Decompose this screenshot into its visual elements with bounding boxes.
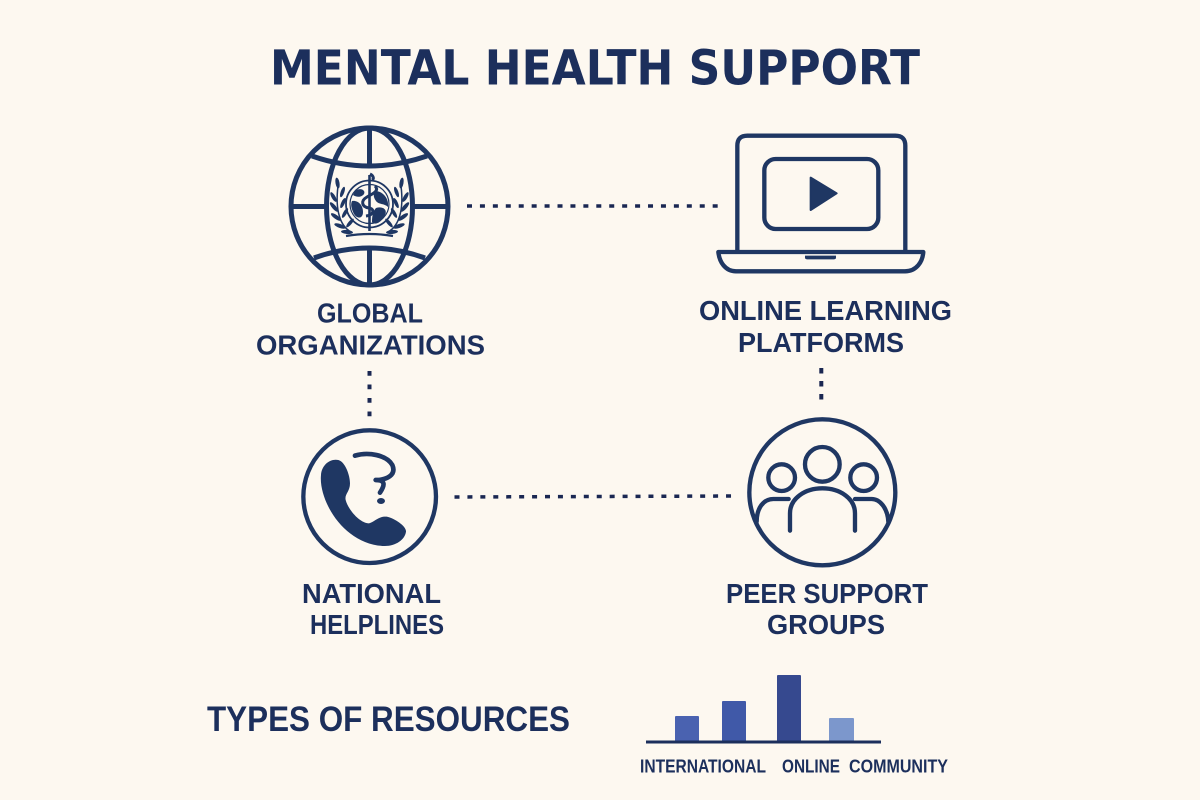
label: online learning platforms — [699, 295, 952, 358]
label: peer support groups: GROUPS — [767, 609, 885, 640]
connector: online to peer — [819, 368, 823, 401]
label: peer support groups — [726, 578, 928, 640]
laurel right — [384, 177, 410, 235]
heading: types of resources: TYPES OF RESOURCES — [207, 700, 570, 739]
label: global organizations: GLOBAL — [317, 298, 423, 328]
bar: fourth — [829, 718, 854, 742]
label: global organizations: ORGANIZATIONS — [256, 330, 485, 360]
label: online learning platforms: PLATFORMS — [738, 327, 904, 358]
label: national helplines: NATIONAL — [302, 578, 441, 609]
chart label: online: ONLINE — [782, 756, 840, 776]
bar: third — [777, 675, 801, 742]
label: national helplines — [302, 578, 444, 640]
connector: helplines to peer — [454, 496, 732, 497]
icon: peer support group — [749, 419, 895, 565]
label: online learning platforms: ONLINE LEARNING — [699, 295, 952, 326]
bar chart — [640, 675, 948, 776]
chart label: community: COMMUNITY — [849, 756, 948, 776]
label: national helplines: HELPLINES — [310, 609, 444, 640]
bar: second — [722, 701, 746, 742]
icon: phone with question mark — [303, 430, 436, 563]
label: peer support groups: PEER SUPPORT — [726, 578, 928, 609]
emblem — [329, 174, 410, 236]
chart axis — [646, 740, 881, 744]
icon: laptop with play button — [718, 136, 923, 271]
bar: first — [675, 716, 699, 742]
label: global organizations — [256, 298, 485, 360]
chart label: international: INTERNATIONAL — [640, 756, 766, 776]
laurel left — [329, 177, 355, 235]
connector: global to online — [467, 204, 718, 208]
icon: globe with emblem — [291, 128, 448, 285]
title: MENTAL HEALTH SUPPORT — [270, 40, 920, 96]
connector: global to helplines — [368, 371, 372, 417]
